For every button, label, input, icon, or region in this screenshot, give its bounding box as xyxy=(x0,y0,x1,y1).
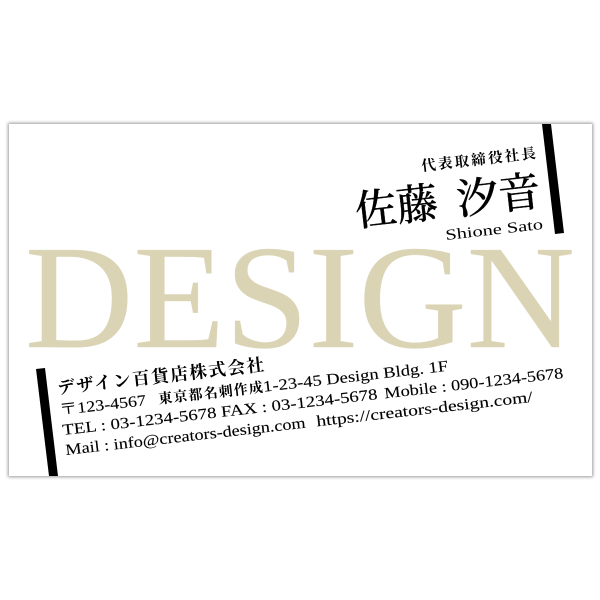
phone line: TEL : 03-1234-5678 FAX : 03-1234-5678 xyxy=(62,386,379,439)
person name xyxy=(353,169,543,236)
address line xyxy=(59,358,449,419)
contact details xyxy=(59,358,565,459)
web line: https://creators-design.com/ xyxy=(316,389,534,430)
accent bar: top right xyxy=(542,124,564,234)
person name: 汐音 xyxy=(454,169,543,224)
accent bar: bottom left xyxy=(36,368,58,476)
address line: 〒123-4567 xyxy=(59,392,147,419)
address line: 東京都名刺作成 xyxy=(157,379,264,408)
large DESIGN wordmark: DESIGN xyxy=(25,216,575,380)
romanized name: Shione Sato xyxy=(445,217,544,244)
job title: 代表取締役社長 xyxy=(420,144,537,175)
phone line xyxy=(62,365,565,439)
address line: 1-23-45 Design Bldg. 1F xyxy=(262,358,449,396)
web line xyxy=(65,389,534,459)
phone line: Mobile : 090-1234-5678 xyxy=(383,365,565,402)
web line: Mail : info@creators-design.com xyxy=(65,415,306,459)
company name: デザイン百貨店株式会社 xyxy=(56,354,266,398)
person name: 佐藤 xyxy=(353,181,441,236)
card panel xyxy=(8,123,593,477)
